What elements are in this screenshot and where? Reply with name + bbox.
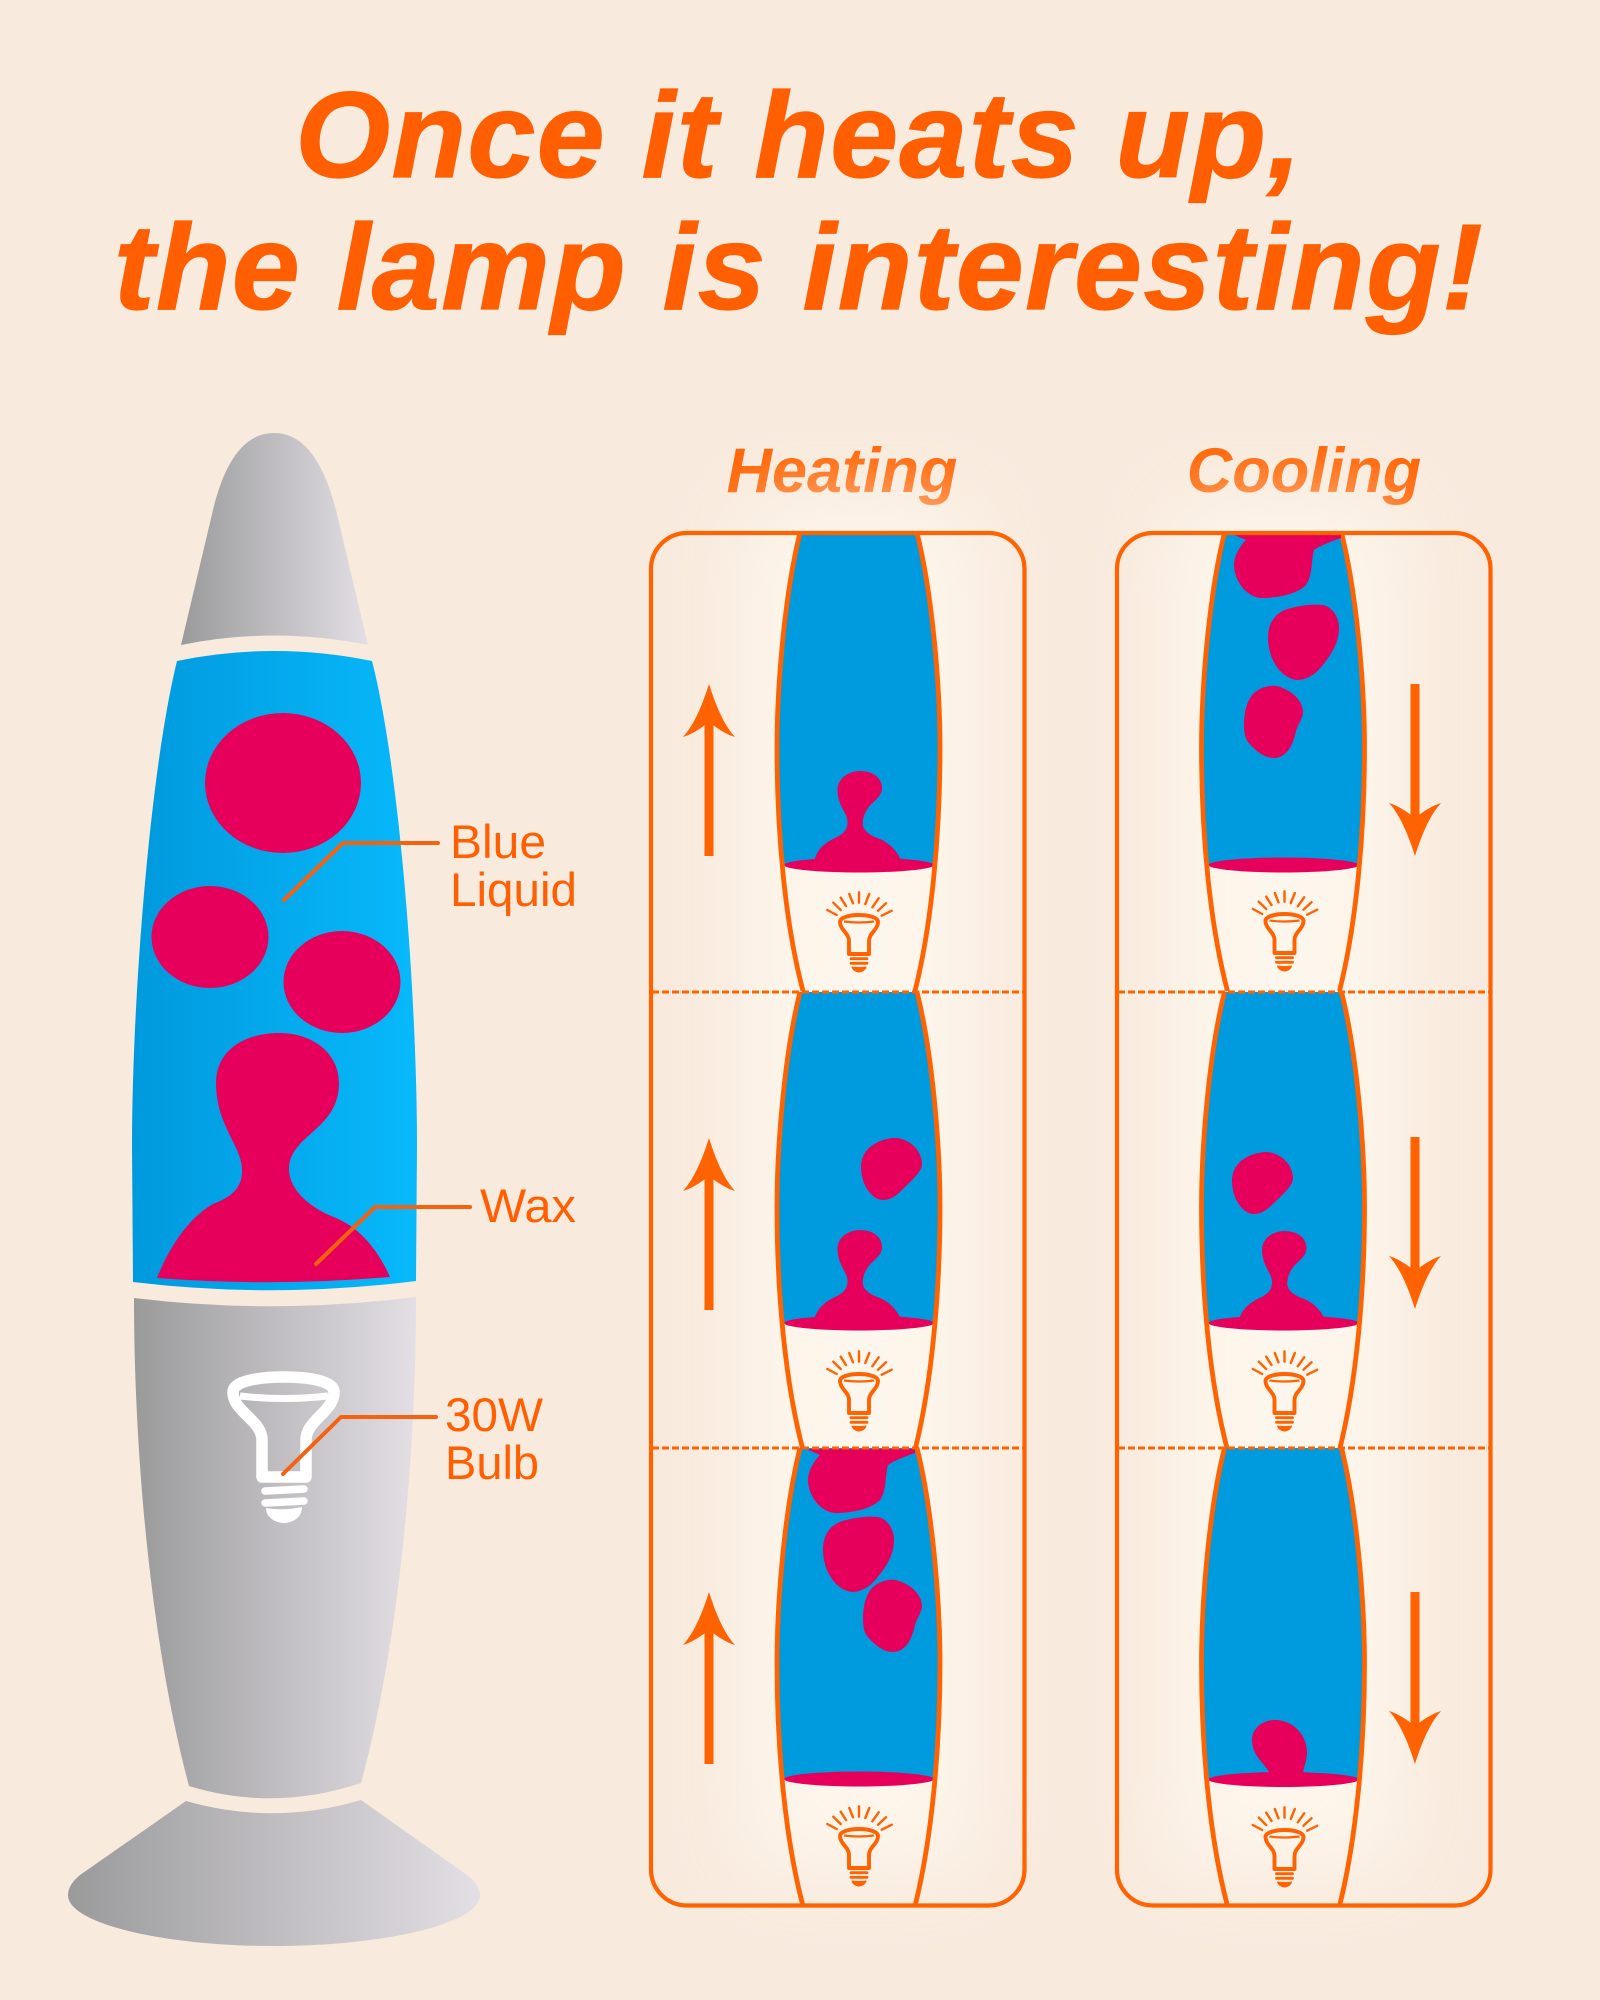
callout: Blue Liquid bbox=[284, 815, 577, 916]
stage 3 lamp bbox=[777, 1448, 940, 1906]
title: the lamp is interesting! bbox=[114, 199, 1484, 335]
blue liquid vessel bbox=[132, 651, 417, 1290]
panel: cooling bbox=[1117, 533, 1490, 1906]
stage 3 settling blob bbox=[1252, 1720, 1307, 1775]
stage 1 lamp bbox=[777, 533, 940, 991]
arrow down 1 bbox=[1389, 684, 1441, 856]
lamp base bbox=[134, 1297, 416, 1798]
lamp foot bbox=[68, 1800, 480, 1946]
stage 1 wax blobs bbox=[1232, 534, 1341, 758]
main lava lamp bbox=[68, 433, 480, 1946]
panel: heating bbox=[651, 533, 1024, 1906]
stage 2 sinking blob bbox=[1232, 1152, 1293, 1214]
panel glow: heating bbox=[745, 503, 975, 1870]
wax blob left bbox=[152, 886, 268, 988]
stage 2 rising blob bbox=[861, 1138, 922, 1200]
callout: Wax: Wax bbox=[480, 1179, 576, 1232]
arrow up 2 bbox=[683, 1138, 735, 1310]
heading: Heating: Heating bbox=[726, 436, 958, 506]
callout: Wax bbox=[316, 1179, 576, 1264]
stage 3 lamp bbox=[1202, 1448, 1364, 1906]
icon: white bulb bbox=[233, 1377, 334, 1523]
stage 2 lamp bbox=[1202, 992, 1364, 1450]
callout: 30W Bulb bbox=[283, 1388, 544, 1489]
wax blob top bbox=[205, 713, 361, 853]
stage dividers bbox=[652, 992, 1024, 1448]
stage 3 wax blobs bbox=[806, 1449, 922, 1652]
wax mound bbox=[157, 1033, 390, 1282]
title: Once it heats up, bbox=[295, 67, 1303, 203]
stage 1 lamp bbox=[1202, 533, 1364, 991]
heating panel border bbox=[651, 533, 1024, 1906]
callout: Blue Liquid: Blue bbox=[450, 815, 546, 868]
arrow up 3 bbox=[683, 1592, 735, 1764]
arrow up 1 bbox=[683, 684, 735, 856]
wax blob right bbox=[284, 931, 400, 1033]
stage dividers bbox=[1118, 992, 1490, 1448]
lamp cap bbox=[181, 433, 368, 645]
heading: Cooling: Cooling bbox=[1187, 436, 1421, 506]
arrow down 2 bbox=[1389, 1137, 1441, 1309]
stage 2 lamp bbox=[777, 992, 940, 1450]
arrow down 3 bbox=[1389, 1592, 1441, 1764]
cooling panel border bbox=[1117, 533, 1490, 1906]
panel glow: cooling bbox=[1170, 503, 1400, 1870]
callout: 30W Bulb: Bulb bbox=[445, 1436, 539, 1489]
callout: Blue Liquid: Liquid bbox=[450, 863, 577, 916]
callout: 30W Bulb: 30W bbox=[445, 1388, 544, 1441]
